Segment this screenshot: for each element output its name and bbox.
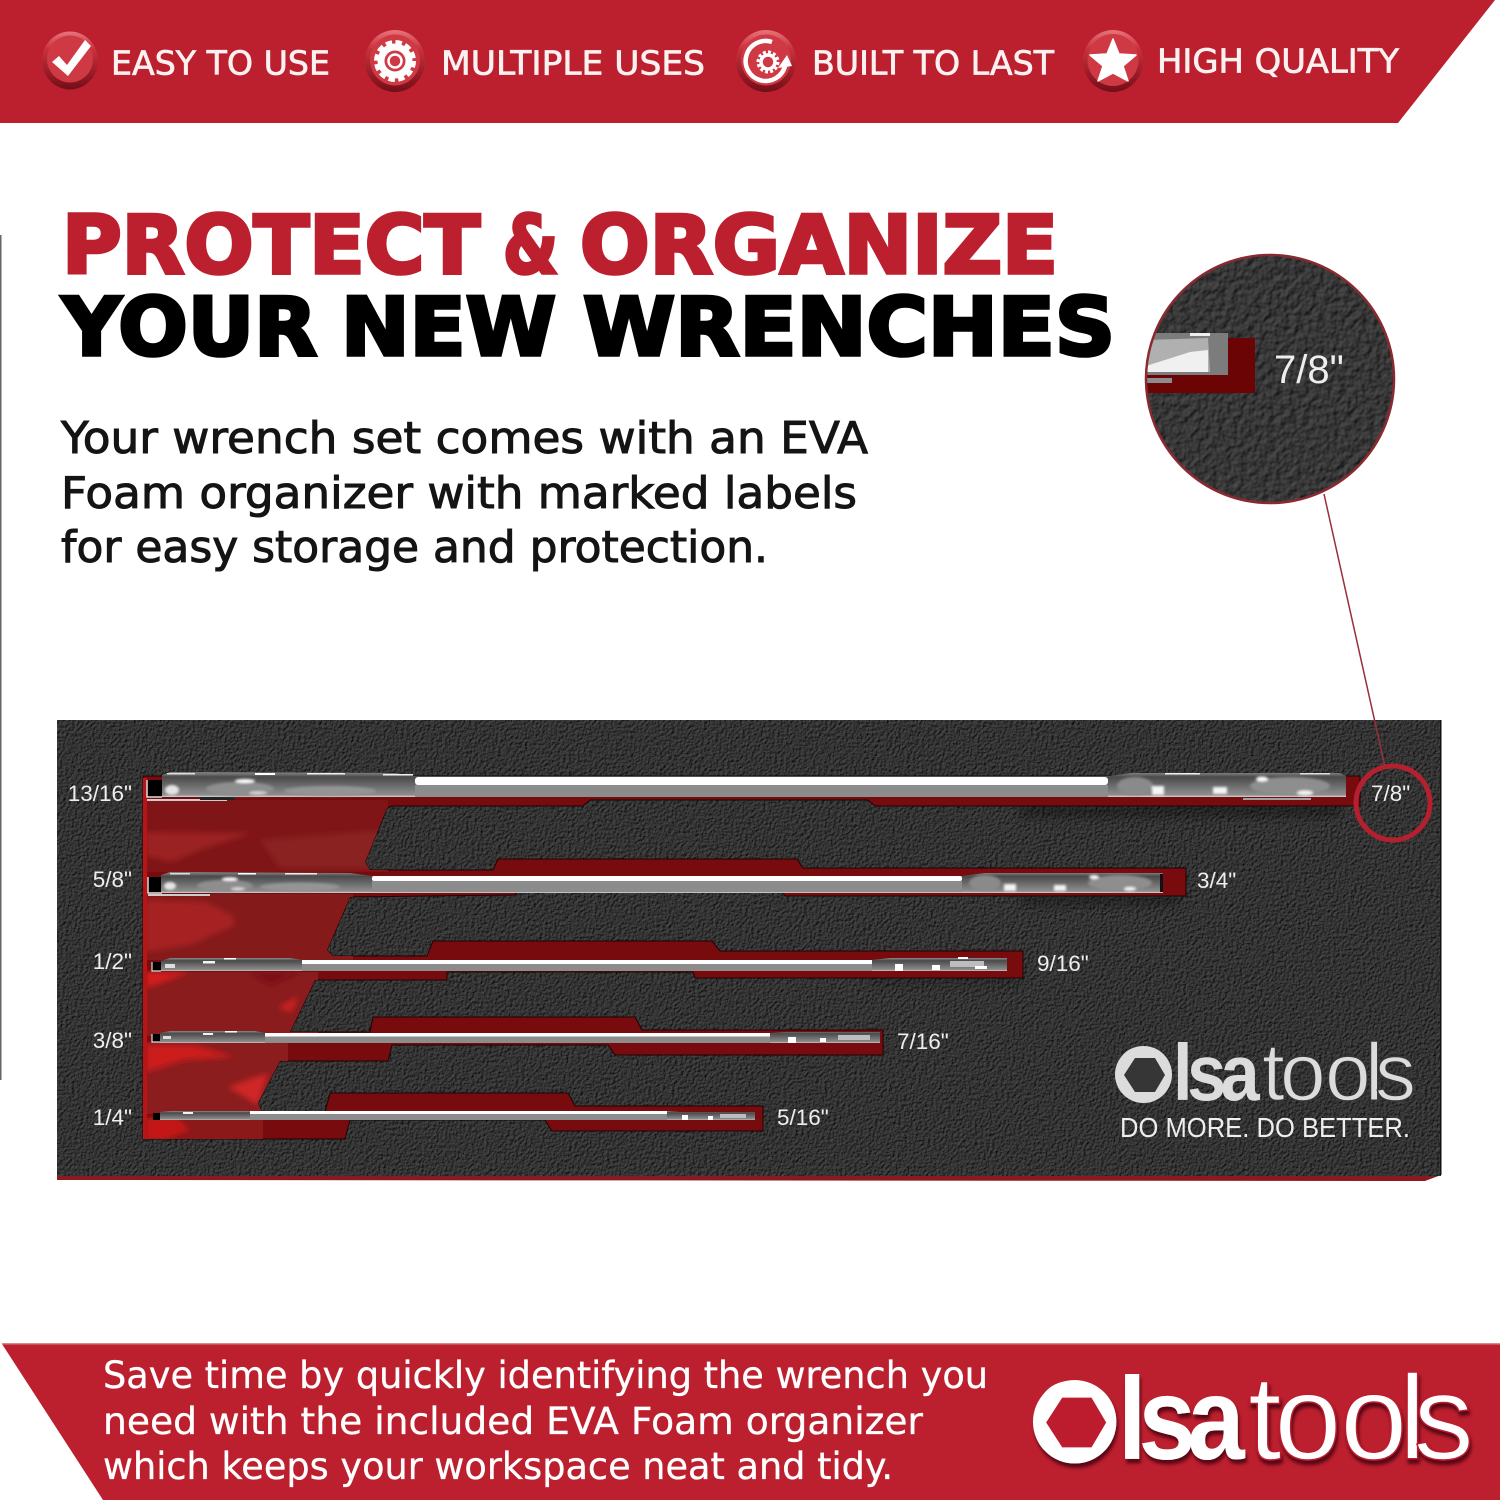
heading: WRENCHES (583, 281, 1115, 374)
size labels: 13/16" (68, 781, 132, 806)
size labels: 1/4" (93, 1105, 132, 1130)
wrench: 1/2 to 9/16 (152, 957, 1007, 971)
body text: for easy storage and protection. (61, 522, 768, 573)
heading: PROTECT (62, 199, 480, 292)
tray logo: lsa (1173, 1028, 1261, 1117)
label: multiple uses: MULTIPLE USES (441, 44, 705, 82)
size labels: 1/2" (93, 949, 132, 974)
banner text (103, 1354, 988, 1488)
body text: Foam organizer with marked labels (61, 468, 857, 519)
heading (61, 199, 1115, 374)
wrench: 13/16 to 7/8 (147, 772, 1346, 801)
wrench: 5/8 to 3/4 (148, 872, 1163, 896)
icon: star badge (1083, 30, 1143, 92)
size labels (68, 781, 1410, 1130)
banner logo: O (1031, 1359, 1116, 1486)
tray logo (1114, 1027, 1416, 1143)
banner logo (1031, 1351, 1474, 1486)
bottom banner (2, 1343, 1500, 1500)
size labels: 9/16" (1037, 951, 1089, 976)
size labels: 5/8" (93, 867, 132, 892)
heading: NEW (341, 281, 556, 374)
heading: & (503, 199, 558, 292)
left edge strip (0, 235, 2, 1080)
label: easy to use: EASY TO USE (111, 44, 330, 82)
size labels: 7/8" (1371, 781, 1410, 806)
size labels: 5/16" (777, 1105, 829, 1130)
tray logo: DO MORE. DO BETTER. (1120, 1112, 1410, 1143)
callout: magnified label: 7/8" (1274, 348, 1344, 392)
banner logo: tools (1248, 1351, 1474, 1485)
banner text: which keeps your workspace neat and tidy. (103, 1445, 893, 1488)
heading: ORGANIZE (580, 199, 1058, 292)
size labels: 3/8" (93, 1028, 132, 1053)
body text (60, 413, 868, 573)
callout: magnified label (1146, 255, 1394, 503)
label: high quality: HIGH QUALITY (1157, 42, 1400, 80)
banner text: need with the included EVA Foam organizer (103, 1400, 924, 1443)
icon: check badge (42, 32, 98, 90)
label: built to last: BUILT TO LAST (812, 44, 1055, 82)
banner text: Save time by quickly identifying the wrench you (103, 1354, 988, 1397)
red foam layer (143, 776, 1360, 1140)
tray logo: O (1114, 1030, 1172, 1118)
tray logo: tools (1262, 1027, 1416, 1118)
body text: Your wrench set comes with an EVA (60, 413, 868, 464)
top banner (0, 0, 1495, 123)
heading: YOUR (61, 281, 317, 374)
wrench: 3/8 to 7/16 (152, 1031, 880, 1043)
callout leader line (1324, 494, 1385, 767)
icon: cycle badge (736, 30, 796, 92)
callout ring (1356, 766, 1430, 840)
wrench: 1/4 to 5/16 (153, 1111, 755, 1120)
soft wrench shadows on foam (870, 806, 1340, 984)
icon: gear badge (365, 30, 425, 92)
banner logo: lsa (1118, 1354, 1246, 1485)
size labels: 7/16" (897, 1029, 949, 1054)
size labels: 3/4" (1197, 868, 1236, 893)
panel: foam tray (57, 720, 1442, 1181)
